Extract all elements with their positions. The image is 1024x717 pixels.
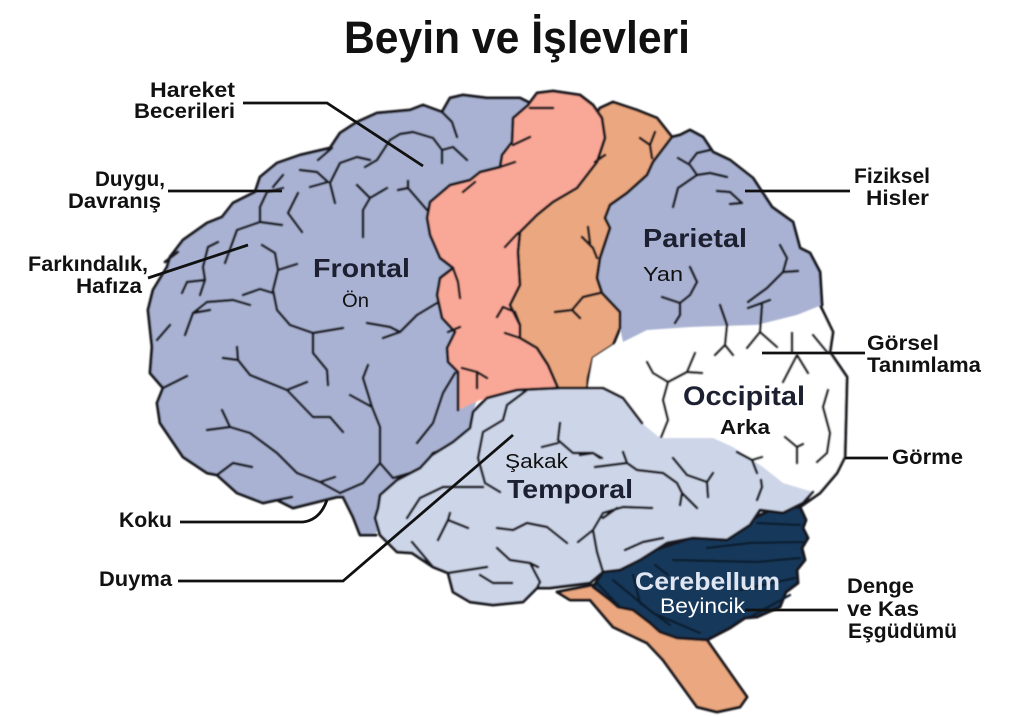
- cerebellum folds: [597, 523, 803, 633]
- label: Denge ve Kas Eşgüdümü: Denge: [847, 575, 914, 598]
- label: Ön: Ön: [342, 291, 369, 312]
- function labels: Becerileri: [134, 100, 235, 123]
- label: Görsel Tanımlama: Görsel: [867, 332, 939, 355]
- label: Cerebellum: Cerebellum: [635, 568, 780, 596]
- function labels: ve Kas: [847, 598, 919, 621]
- brain stem: [557, 585, 747, 712]
- label: Fiziksel Hisler: Fiziksel: [854, 165, 930, 188]
- cerebellum: [593, 507, 808, 640]
- label: Hareket Becerileri: Hareket: [150, 79, 235, 102]
- label: Arka: Arka: [720, 417, 771, 439]
- label: Koku: Koku: [119, 509, 172, 532]
- occipital lobe: [588, 305, 847, 507]
- label: Duygu, Davranış: Duygu,: [95, 168, 165, 191]
- label: Occipital: Occipital: [683, 381, 805, 411]
- occipital sulci: [647, 353, 830, 463]
- label: Parietal: Parietal: [643, 223, 747, 253]
- function labels: Eşgüdümü: [848, 620, 957, 643]
- temporal lobe: [375, 388, 813, 605]
- label: Frontal: Frontal: [313, 253, 410, 283]
- motor strip (pink): [427, 91, 605, 410]
- function labels: Hisler: [866, 187, 929, 210]
- function labels: Tanımlama: [867, 354, 981, 377]
- sensory strip (orange): [495, 102, 672, 392]
- function labels: Davranış: [68, 190, 161, 213]
- label: Temporal: Temporal: [507, 474, 633, 504]
- label: Duyma: Duyma: [99, 568, 172, 591]
- label: Farkındalık, Hafıza: Farkındalık,: [28, 253, 148, 276]
- brain illustration: [148, 91, 847, 712]
- frontal lobe: [148, 95, 530, 535]
- leader lines: [148, 103, 888, 610]
- title: Beyin ve İşlevleri: [344, 12, 690, 63]
- region labels: [313, 223, 805, 618]
- label: Görme: Görme: [892, 446, 963, 469]
- label: Şakak: Şakak: [505, 451, 569, 473]
- function labels: [28, 79, 981, 643]
- function labels: Hafıza: [76, 275, 142, 298]
- frontal sulci: [157, 112, 467, 500]
- parietal lobe: [597, 130, 827, 355]
- label: Beyincik: Beyincik: [660, 595, 746, 618]
- label: Yan: Yan: [643, 264, 683, 286]
